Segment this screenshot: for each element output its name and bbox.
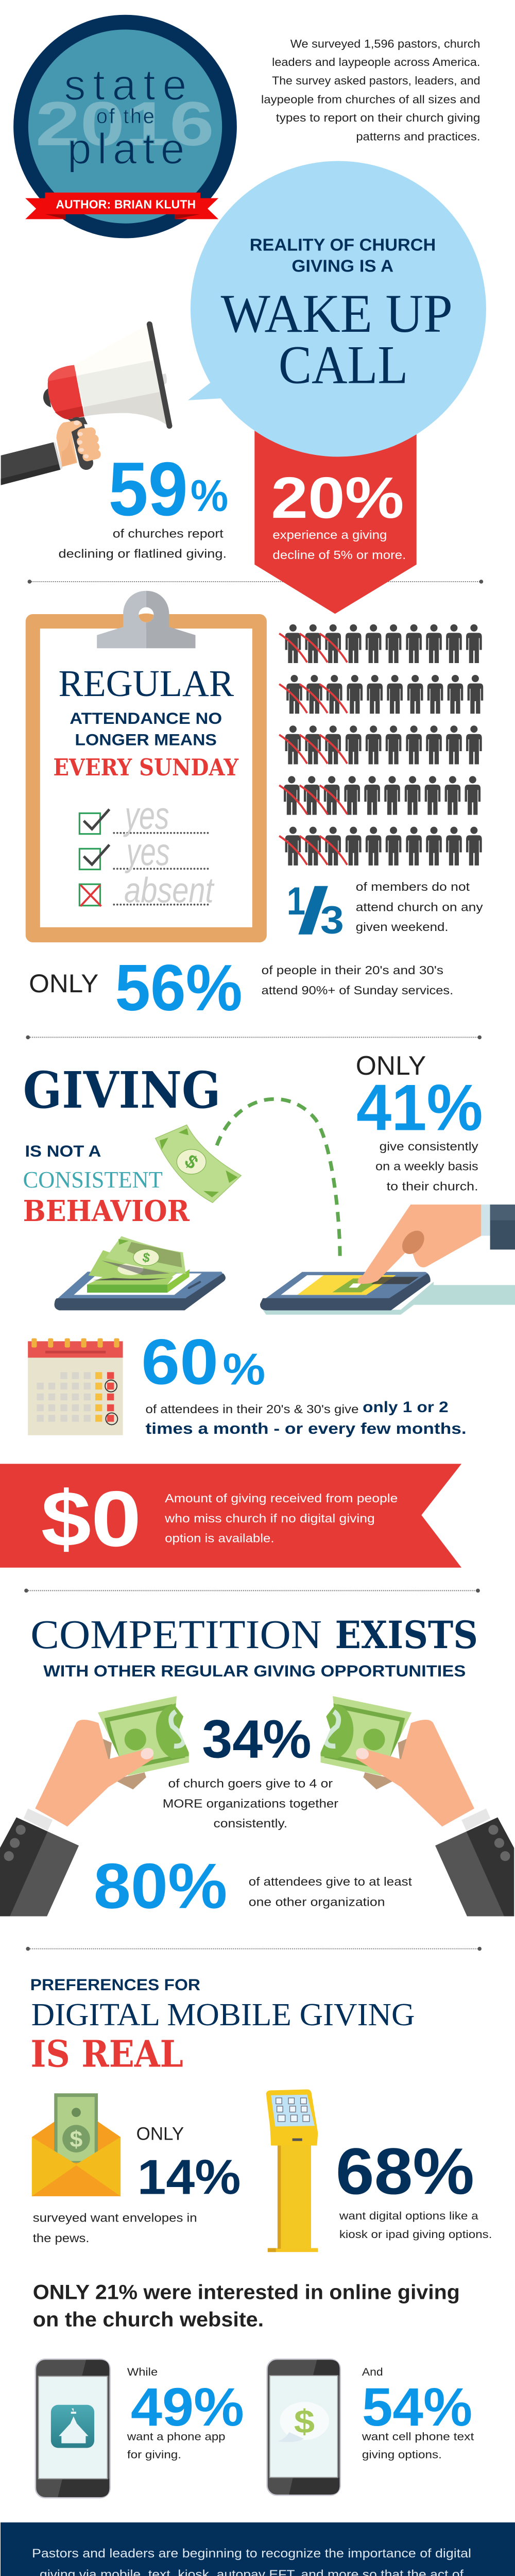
stat: 60%: of attendees in their 20's & 30's give <box>146 1402 358 1416</box>
speech bubble: wake up call: REALITY OF CHURCH <box>250 236 436 255</box>
stat: one third: 1 <box>287 879 305 923</box>
stat: only 41%: to their church. <box>387 1180 478 1193</box>
stat: only 56%: attend 90%+ of Sunday services. <box>262 984 453 997</box>
heading: competition exists <box>30 1612 478 1680</box>
heading: giving is not a consistent behavior <box>23 1061 221 1228</box>
red ribbon: $0: $0 <box>41 1475 141 1563</box>
attendance checklist: absent <box>124 870 215 910</box>
conclusion text: Pastors and leaders are beginning to recognize the importance of digital <box>32 2547 471 2561</box>
stat: 60%: % <box>222 1345 265 1395</box>
heading: competition exists: EXISTS <box>335 1613 478 1657</box>
icon: right hand tearing bill <box>320 1696 514 1916</box>
intro text <box>261 37 480 143</box>
red banner: 20%: decline of 5% or more. <box>272 548 406 562</box>
stat: 80%: one other organization <box>249 1895 385 1909</box>
stat: one third: attend church on any <box>356 901 483 914</box>
chart: people pictogram, one third crossed out <box>279 624 483 866</box>
section: giving is not consistent <box>0 1036 515 1568</box>
stat: only 56% <box>29 952 453 1025</box>
stat: 54%: And <box>362 2366 383 2378</box>
icon: giving kiosk <box>266 2089 318 2252</box>
heading: giving is not a consistent behavior: BEHAVIOR <box>23 1194 190 1228</box>
logo badge: state of the plate: AUTHOR: BRIAN KLUTH <box>56 197 196 211</box>
stat: 34% <box>163 1709 338 1830</box>
stat: 68% <box>336 2135 492 2241</box>
stat: 80%: of attendees give to at least <box>249 1875 412 1888</box>
intro text: types to report on their church giving <box>276 111 480 124</box>
heading: preferences for digital mobile giving is real: IS REAL <box>30 2033 183 2076</box>
logo badge: state of the plate: of the <box>96 105 154 128</box>
icon: phone with church app <box>36 2359 110 2498</box>
panel: clipboard <box>26 591 267 942</box>
icon: megaphone in hand <box>1 324 169 485</box>
intro text: laypeople from churches of all sizes and <box>261 93 480 106</box>
stat: 59%: declining or flatlined giving. <box>59 547 227 560</box>
stat: 54% <box>362 2366 474 2461</box>
stat: 60%: only 1 or 2 <box>363 1399 449 1416</box>
red banner: 20%: experience a giving <box>272 528 387 541</box>
stat: only 56%: ONLY <box>29 969 98 998</box>
stat: one third: of members do not <box>356 880 470 893</box>
stat: 68%: kiosk or ipad giving options. <box>339 2228 492 2241</box>
red banner: 20% <box>254 427 417 614</box>
stat: 49%: want a phone app <box>127 2430 226 2443</box>
statement: only 21% online giving: on the church website. <box>33 2308 264 2331</box>
heading: giving is not a consistent behavior: GIVING <box>23 1061 221 1120</box>
stat: 59% <box>59 447 228 560</box>
heading: giving is not a consistent behavior: IS NOT A <box>25 1142 101 1160</box>
intro text: leaders and laypeople across America. <box>272 56 480 69</box>
stat: only 14%: 14% <box>138 2149 241 2205</box>
attendance checklist: yes <box>125 830 170 873</box>
statement: only 21% online giving: ONLY 21% were interested in online giving <box>33 2281 460 2303</box>
section: regular attendance <box>26 591 483 1025</box>
heading: competition exists: COMPETITION <box>30 1612 322 1657</box>
red ribbon: $0: option is available. <box>165 1532 274 1545</box>
stat: 60% <box>141 1326 467 1437</box>
icon: flying dollar bill: $ <box>181 1150 202 1173</box>
icon: envelope with cash <box>32 2093 121 2196</box>
heading: preferences for digital mobile giving is real: PREFERENCES FOR <box>30 1975 200 1994</box>
icon: phone with money stack <box>55 1236 226 1310</box>
icon: flying dollar bill <box>156 1125 241 1202</box>
stat: one third: 3 <box>320 898 344 942</box>
speech bubble: wake up call: WAKE UP <box>221 283 453 344</box>
stat: only 56%: of people in their 20's and 30's <box>262 963 443 977</box>
logo badge: state of the plate: state <box>64 60 186 109</box>
stat: only 41% <box>356 1051 483 1193</box>
red ribbon: $0 <box>0 1464 461 1568</box>
stat: 60%: times a month - or every few months. <box>146 1420 467 1437</box>
heading: regular attendance: LONGER MEANS <box>75 730 217 749</box>
icon: clipboard clip <box>97 591 195 648</box>
stat: only 41%: ONLY <box>356 1051 426 1081</box>
stat: only 41%: 41% <box>356 1071 483 1144</box>
logo badge: state of the plate: 2016 <box>36 89 214 159</box>
stat: one third: / <box>297 874 329 947</box>
icon: phone with text giving bubble: $ <box>294 2403 315 2440</box>
heading: regular attendance: ATTENDANCE NO <box>70 709 222 727</box>
heading: preferences for digital mobile giving is real <box>30 1975 415 2076</box>
stat: 54%: giving options. <box>362 2448 442 2461</box>
stat: 54%: 54% <box>362 2377 472 2437</box>
arrow: dashed arc of money <box>217 1099 340 1259</box>
section: competition exists <box>0 1589 514 2076</box>
icon: envelope with cash: $ <box>70 2127 83 2152</box>
heading: regular attendance: REGULAR <box>59 663 234 704</box>
stat: only 56%: 56% <box>115 952 243 1025</box>
stat: 49%: 49% <box>131 2377 244 2437</box>
red ribbon: $0: who miss church if no digital giving <box>164 1512 375 1525</box>
intro text: The survey asked pastors, leaders, and <box>272 74 480 87</box>
stat: one third: given weekend. <box>356 920 449 934</box>
divider <box>26 1036 482 1039</box>
stat: 60%: 60 <box>141 1326 218 1398</box>
stat: 34%: of church goers give to 4 or <box>168 1776 333 1790</box>
stat: 49%: for giving. <box>127 2448 181 2461</box>
stat: only 14%: ONLY <box>136 2124 184 2144</box>
icon: phone tapped by hand <box>260 1205 515 1315</box>
speech bubble: wake up call <box>188 161 486 457</box>
attendance checklist <box>79 794 215 910</box>
stat: only 14%: surveyed want envelopes in <box>33 2211 197 2225</box>
heading: regular attendance <box>53 663 239 781</box>
stat: 49%: While <box>127 2366 158 2378</box>
red ribbon: $0: Amount of giving received from people <box>165 1492 398 1505</box>
stat: only 14%: the pews. <box>33 2231 89 2245</box>
divider <box>28 580 483 584</box>
icon: phone with text giving bubble <box>267 2359 340 2495</box>
icon: calendar <box>28 1338 123 1435</box>
intro text: patterns and practices. <box>356 130 480 143</box>
red banner: 20%: 20% <box>271 465 404 531</box>
divider <box>24 1589 480 1592</box>
stat: only 14% <box>33 2124 241 2245</box>
heading: competition exists: WITH OTHER REGULAR GIVING OPPORTUNITIES <box>43 1662 466 1680</box>
icon: left hand tearing bill <box>0 1696 190 1916</box>
stat: 34%: consistently. <box>214 1817 287 1830</box>
stat: 59%: of churches report <box>113 527 224 540</box>
conclusion text <box>32 2547 471 2576</box>
stat: 80% <box>94 1850 412 1922</box>
attendance checklist: yes <box>123 794 169 837</box>
stat: only 41%: give consistently <box>380 1140 478 1153</box>
logo badge: state of the plate <box>13 15 237 238</box>
stat: one third <box>287 874 483 947</box>
stat: 68%: 68% <box>336 2135 474 2208</box>
heading: giving is not a consistent behavior: CONSISTENT <box>23 1166 163 1193</box>
stat: 34%: 34% <box>202 1709 312 1769</box>
speech bubble: wake up call: GIVING IS A <box>291 257 393 276</box>
heading: preferences for digital mobile giving is real: DIGITAL MOBILE GIVING <box>31 1996 415 2032</box>
stat: 59%: 59 <box>108 447 188 532</box>
stat: 49% <box>127 2366 244 2461</box>
stat: 80%: 80% <box>94 1850 227 1922</box>
intro text: We surveyed 1,596 pastors, church <box>290 37 480 50</box>
stat: 59%: % <box>191 471 228 521</box>
icon: phone with money stack: $ <box>141 1250 151 1265</box>
stat: 68%: want digital options like a <box>339 2209 479 2222</box>
section: digital preferences <box>32 2089 492 2498</box>
panel: navy conclusion <box>1 2522 515 2576</box>
divider <box>26 1947 482 1951</box>
section: intro and wake up call <box>13 15 486 614</box>
statement: only 21% online giving <box>33 2281 460 2331</box>
stat: 54%: want cell phone text <box>362 2430 474 2443</box>
stat: 34%: MORE organizations together <box>163 1797 338 1810</box>
speech bubble: wake up call: CALL <box>279 335 408 395</box>
stat: only 41%: on a weekly basis <box>375 1160 478 1173</box>
heading: regular attendance: EVERY SUNDAY <box>53 753 239 781</box>
logo badge: state of the plate: plate <box>67 125 184 173</box>
